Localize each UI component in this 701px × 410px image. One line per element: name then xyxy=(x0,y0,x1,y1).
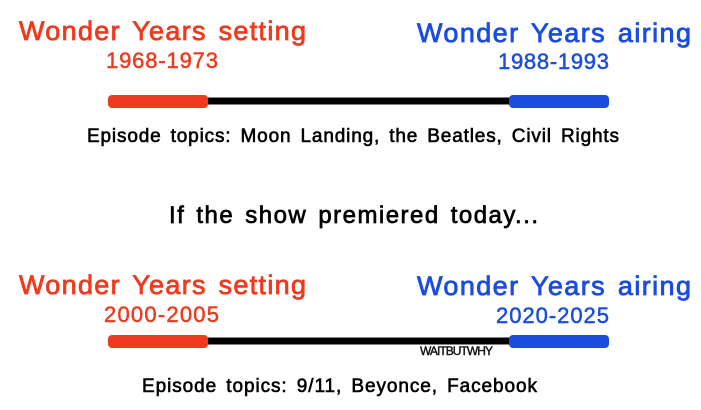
heading: setting: Wonder Years setting xyxy=(19,16,306,46)
heading: airing: Wonder Years airing xyxy=(417,18,691,48)
years: setting: 2000-2005 xyxy=(104,302,219,327)
timeline bar xyxy=(108,335,609,348)
panel: original show timeline xyxy=(19,16,691,147)
episode topics: Episode topics: Moon Landing, the Beatles, Civil Rights xyxy=(87,126,619,147)
heading: setting: Wonder Years setting xyxy=(19,270,306,300)
timeline bar xyxy=(108,95,609,108)
transition heading: If the show premiered today... xyxy=(169,202,538,229)
panel: hypothetical show timeline xyxy=(19,270,691,397)
years: airing: 1988-1993 xyxy=(498,49,609,74)
watermark: WAITBUTWHY xyxy=(420,344,493,358)
heading: airing: Wonder Years airing xyxy=(417,271,691,301)
years: airing: 2020-2025 xyxy=(496,303,609,328)
episode topics: Episode topics: 9/11, Beyonce, Facebook xyxy=(142,376,538,397)
years: setting: 1968-1973 xyxy=(106,48,218,73)
